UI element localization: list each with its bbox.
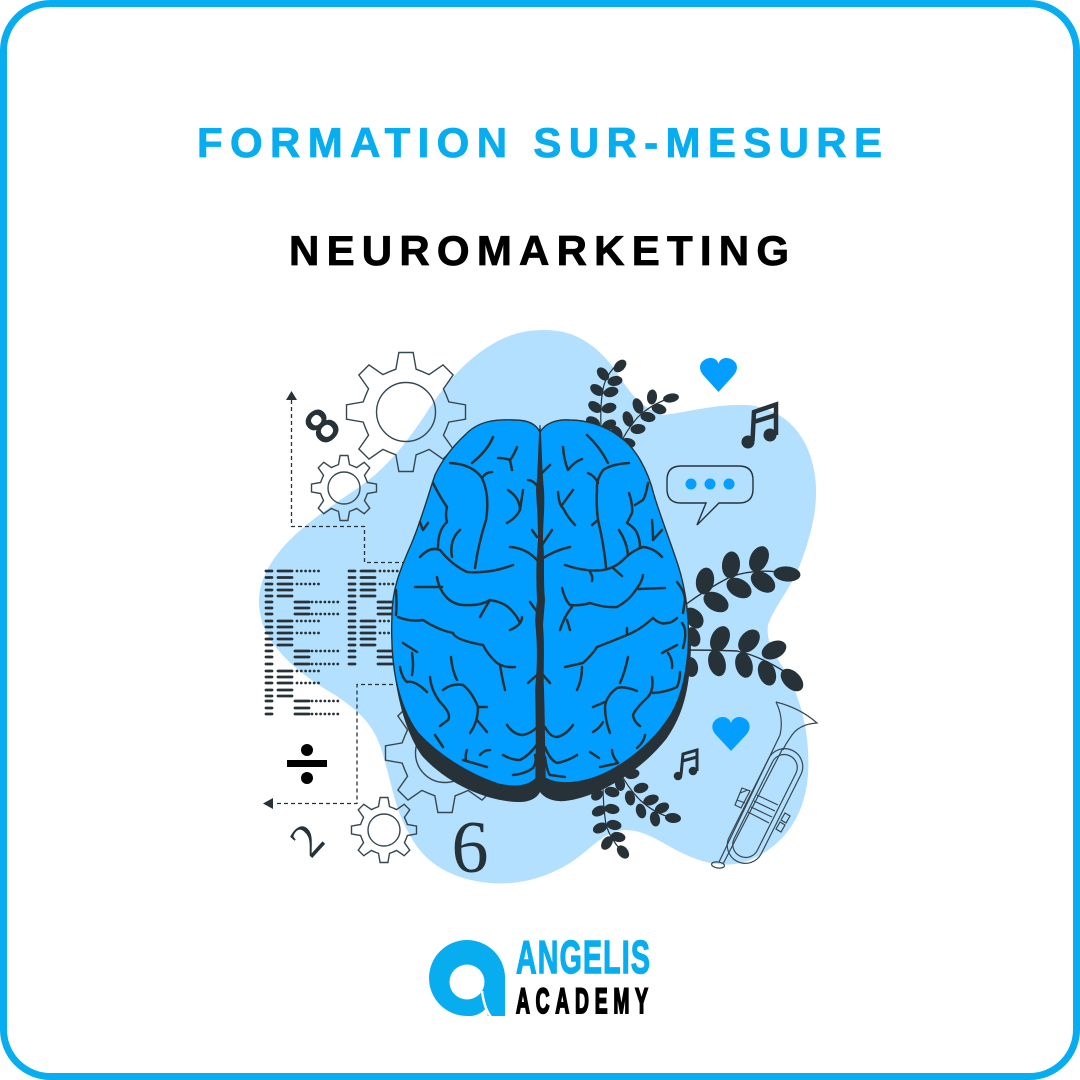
- dashed arrows: [263, 391, 405, 809]
- brain shadow: [392, 625, 691, 802]
- number 2: 2: [280, 814, 335, 867]
- gears: [312, 352, 504, 862]
- icon: music note large: [742, 404, 776, 448]
- small gear bottom: [352, 798, 416, 862]
- title: formation sur-mesure: FORMATION SUR-MESURE: [197, 119, 882, 166]
- division sign: [287, 744, 327, 784]
- logo text: angelis: ANGELIS: [516, 932, 650, 984]
- central fissure: [535, 425, 546, 792]
- number 6: 6: [452, 807, 488, 889]
- plant bottom left: [589, 785, 632, 861]
- number 8: 8: [294, 398, 350, 454]
- large gear top: [346, 352, 466, 472]
- icon: music note small: [674, 750, 697, 780]
- sulci right hemisphere: [540, 435, 685, 777]
- brain: [392, 420, 691, 802]
- icon: trumpet: [711, 702, 817, 869]
- large gear bottom: [386, 694, 504, 812]
- logo text: academy: ACADEMY: [516, 981, 648, 1020]
- data rows right block: [349, 571, 400, 664]
- small gear top: [312, 456, 376, 520]
- illustration: brain and surroundings: [259, 330, 817, 889]
- logo mark: [429, 940, 505, 1017]
- plant top left: [584, 357, 629, 433]
- brain hemispheres: [392, 420, 689, 786]
- plant top right: [609, 389, 680, 449]
- icon: heart bottom: [712, 717, 750, 751]
- logo: [429, 932, 650, 1020]
- plants: [584, 357, 808, 861]
- icon: speech bubble: [667, 466, 753, 525]
- heading: neuromarketing: NEUROMARKETING: [289, 227, 789, 274]
- icon: heart top: [700, 358, 737, 392]
- plant right lower: [682, 606, 808, 696]
- data rows left block: [266, 571, 338, 714]
- sulci left hemisphere: [396, 437, 538, 775]
- plant bottom right: [614, 768, 681, 827]
- background blob: [259, 330, 816, 883]
- plant right upper: [679, 543, 801, 630]
